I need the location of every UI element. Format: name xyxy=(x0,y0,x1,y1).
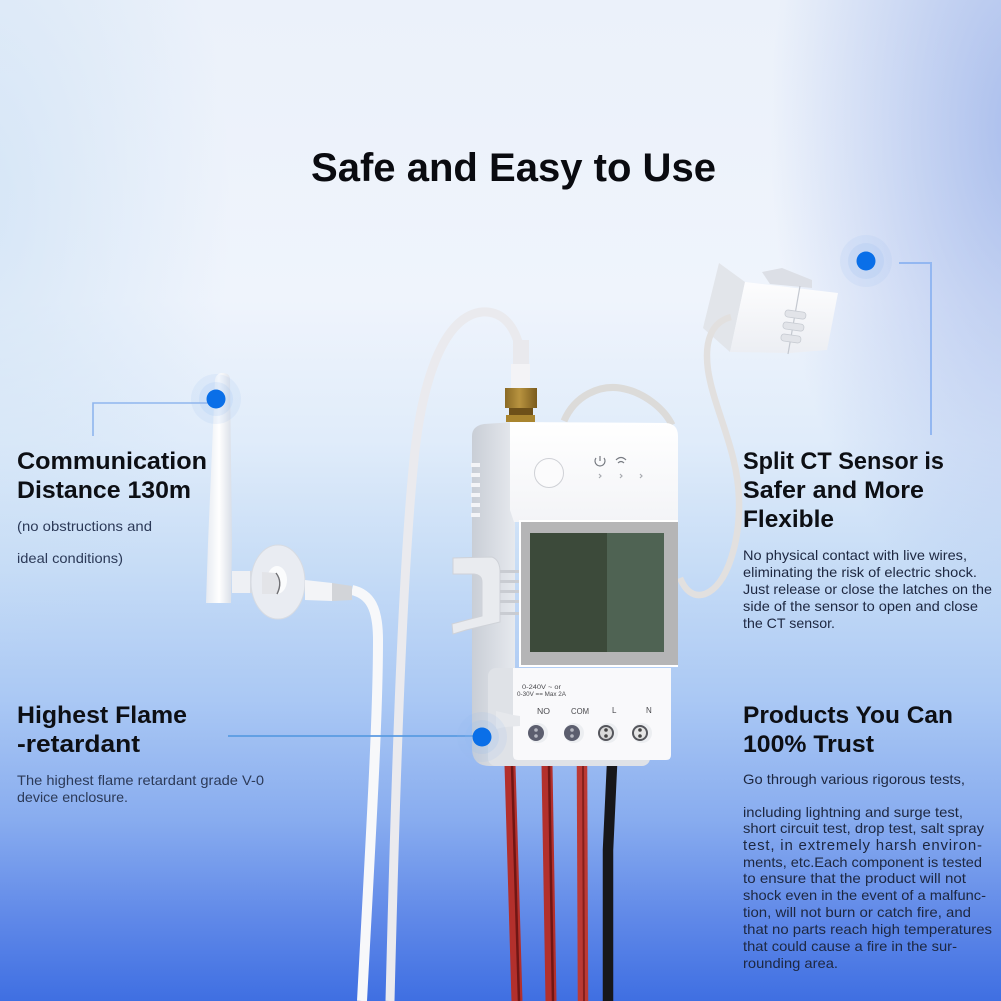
text block: products you can trust xyxy=(743,702,992,971)
connector cable arc xyxy=(564,387,672,425)
callout line: flame-retardant xyxy=(228,735,474,737)
callout marker: antenna xyxy=(191,374,241,424)
text block: products you can trust: including lightning and surge test, xyxy=(743,804,963,820)
status icons xyxy=(595,456,642,478)
text block: products you can trust: to ensure that the product will not xyxy=(743,870,966,886)
CT sensor cable xyxy=(680,317,739,595)
display xyxy=(519,520,678,667)
terminal labels: 0-30V == Max 2A xyxy=(517,691,567,698)
CT sensor xyxy=(703,263,838,354)
screw terminals xyxy=(528,723,652,743)
text block: split CT sensor: No physical contact with live wires, xyxy=(743,547,967,563)
text block: communication distance: Communication xyxy=(17,448,207,475)
text block: split CT sensor: Flexible xyxy=(743,506,834,533)
text block: split CT sensor: the CT sensor. xyxy=(743,615,835,631)
text block: split CT sensor xyxy=(743,448,992,631)
text block: flame retardant: -retardant xyxy=(17,731,140,758)
callout line: antenna xyxy=(93,403,208,436)
text block: products you can trust: short circuit test, drop test, salt spray xyxy=(743,820,984,836)
brass connector xyxy=(505,340,537,422)
callout marker: flame-retardant xyxy=(457,712,507,762)
text block: products you can trust: rounding area. xyxy=(743,955,838,971)
text block: split CT sensor: eliminating the risk of electric shock. xyxy=(743,564,977,580)
icon: antenna xyxy=(206,373,352,619)
text block: products you can trust: that could cause a fire in the sur- xyxy=(743,938,957,954)
text block: products you can trust: Go through various rigorous tests, xyxy=(743,771,965,787)
text block: flame retardant: Highest Flame xyxy=(17,702,187,729)
text block: products you can trust: 100% Trust xyxy=(743,731,874,758)
text block: flame retardant xyxy=(17,702,264,805)
wires xyxy=(510,765,612,1001)
text block: flame retardant: device enclosure. xyxy=(17,789,128,805)
side body xyxy=(472,422,515,766)
text block: split CT sensor: Split CT Sensor is xyxy=(743,448,944,475)
callout marker: CT sensor xyxy=(840,235,892,287)
text block: split CT sensor: side of the sensor to open and close xyxy=(743,598,978,614)
text block: products you can trust: tion, will not burn or catch fire, and xyxy=(743,904,971,920)
text block: communication distance: (no obstructions and xyxy=(17,518,152,534)
button xyxy=(534,458,564,488)
text block: split CT sensor: Safer and More xyxy=(743,477,924,504)
terminal labels: N xyxy=(646,706,652,715)
text block: communication distance: Distance 130m xyxy=(17,477,191,504)
text block: split CT sensor: Just release or close the latches on the xyxy=(743,581,992,597)
text block: flame retardant: The highest flame retardant grade V-0 xyxy=(17,772,264,788)
antenna cable xyxy=(352,590,378,1001)
callout line: CT sensor xyxy=(899,263,931,435)
terminal panel xyxy=(488,668,671,766)
text block: products you can trust: test, in extremely harsh environ- xyxy=(743,837,982,854)
text block: products you can trust: shock even in the event of a malfunc- xyxy=(743,887,986,903)
latch xyxy=(452,557,500,634)
text block: products you can trust: Products You Can xyxy=(743,702,953,729)
terminal labels: L xyxy=(612,706,617,715)
main antenna cable to device xyxy=(390,312,519,1001)
terminal labels: 0-240V ~ or xyxy=(522,684,562,691)
terminal labels: NO xyxy=(537,707,550,716)
terminal labels xyxy=(517,684,652,716)
text block: products you can trust: ments, etc.Each component is tested xyxy=(743,854,982,870)
text block: communication distance xyxy=(17,448,207,566)
title: Safe and Easy to Use xyxy=(311,146,716,190)
vent slots xyxy=(471,463,480,517)
text block: products you can trust: that no parts reach high temperatures xyxy=(743,921,992,937)
terminal labels: COM xyxy=(571,707,589,716)
top cover xyxy=(510,422,678,522)
device xyxy=(452,340,678,1001)
text block: communication distance: ideal conditions) xyxy=(17,550,123,566)
